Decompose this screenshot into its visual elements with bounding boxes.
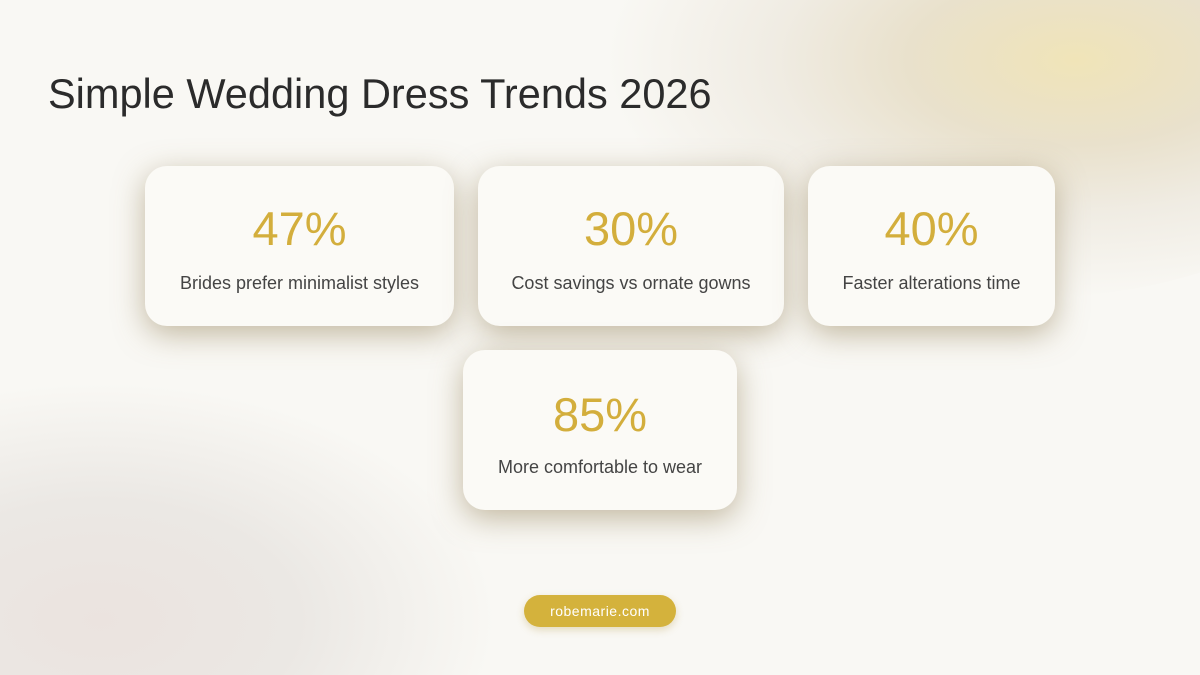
title: Simple Wedding Dress Trends 2026 <box>48 70 712 117</box>
card: 30% <box>478 166 784 326</box>
card: 85% <box>463 350 737 510</box>
card: 40% <box>808 166 1055 326</box>
card: 85%: More comfortable to wear <box>498 457 702 477</box>
footer pill <box>524 595 676 627</box>
card: 47%: Brides prefer minimalist styles <box>180 273 419 293</box>
card: 85%: 85% <box>553 388 647 441</box>
card: 47%: 47% <box>252 202 347 255</box>
card: 40%: 40% <box>884 202 979 255</box>
footer pill: robemarie.com <box>550 603 650 619</box>
card: 30%: Cost savings vs ornate gowns <box>511 273 751 293</box>
card: 40%: Faster alterations time <box>842 273 1021 293</box>
card: 47% <box>145 166 454 326</box>
card: 30%: 30% <box>584 202 678 255</box>
